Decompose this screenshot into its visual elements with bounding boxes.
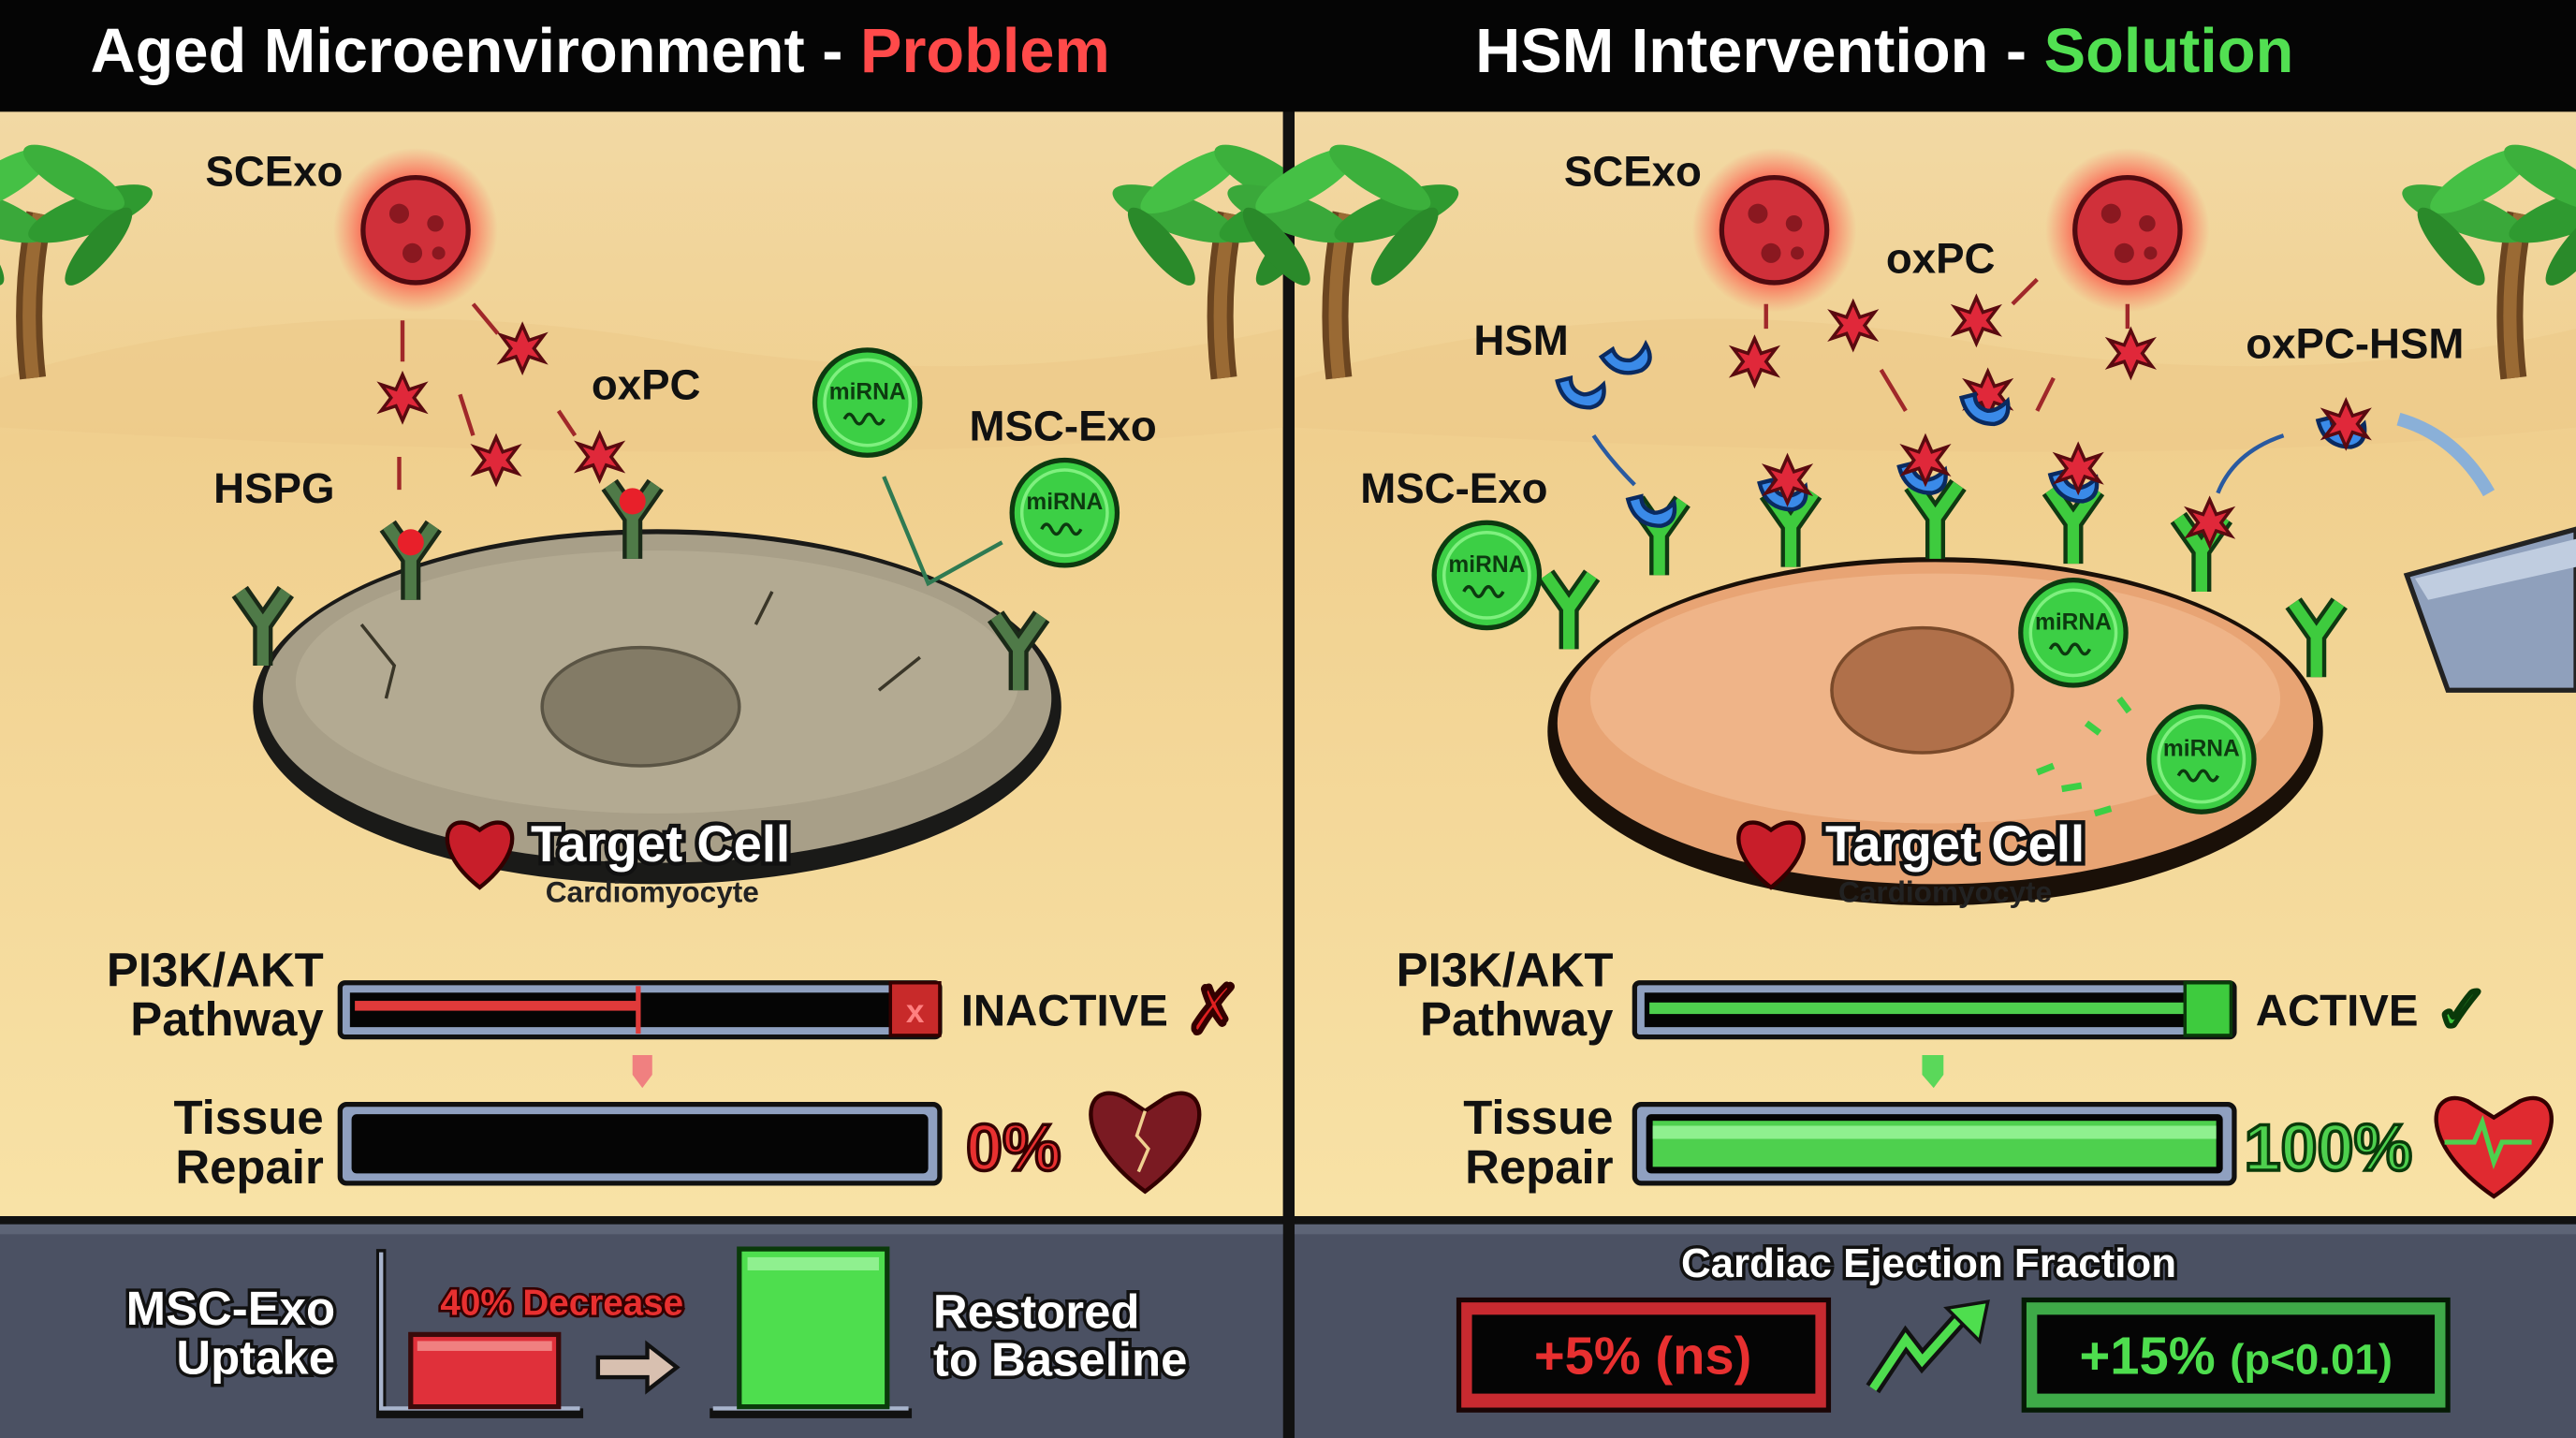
oxPC particles bbox=[1734, 279, 2152, 424]
label: Target Cell bbox=[447, 815, 790, 909]
label: Target Cell: Cardiomyocyte bbox=[1838, 875, 2052, 909]
icon: HSM free bbox=[1558, 338, 1654, 485]
label: MSC-Exo Uptake: MSC-Exo bbox=[126, 1282, 335, 1335]
label: MSC-Exo: MSC-Exo bbox=[970, 402, 1157, 449]
icon: SCExo 1 bbox=[1692, 148, 1856, 313]
icon: palm tree left bbox=[0, 133, 159, 378]
value: 0%: 0% bbox=[966, 1110, 1061, 1184]
arrow: down pink bbox=[633, 1055, 652, 1088]
icon: oxPC-HSM complex bbox=[2217, 401, 2489, 493]
label: INACTIVE bbox=[961, 972, 1241, 1046]
icon: miRNA MSC-Exo 2 bbox=[1012, 461, 1117, 565]
label: Restored to Baseline: to Baseline bbox=[933, 1332, 1187, 1386]
icon: broken heart bbox=[1090, 1093, 1199, 1192]
label: SCExo: SCExo bbox=[1564, 147, 1702, 195]
icon: SCExo bbox=[333, 148, 498, 313]
chart: uptake bars bbox=[381, 1249, 912, 1414]
label: INACTIVE: ✗ bbox=[1186, 972, 1241, 1046]
bar: pathway active bbox=[1634, 983, 2234, 1037]
label: Tissue Repair: Repair bbox=[1465, 1140, 1614, 1194]
label: PI3K/AKT Pathway: Pathway bbox=[1420, 992, 1614, 1046]
icon: tray bbox=[2407, 529, 2576, 690]
box: +15% (p<0.01) bbox=[2024, 1300, 2448, 1410]
title left: Aged Microenvironment - Problem bbox=[91, 17, 1110, 86]
box: +15% (p<0.01): +15% (p<0.01) bbox=[2079, 1327, 2393, 1386]
label: Tissue Repair bbox=[1463, 1091, 1614, 1194]
receptors: healthy with HSM bbox=[1546, 437, 2339, 677]
icon: miRNA 2 bbox=[2021, 580, 2126, 685]
icon: miRNA 3 bbox=[2149, 707, 2254, 812]
label: Restored to Baseline: Restored bbox=[933, 1284, 1139, 1338]
bar: pathway inactive: x bbox=[906, 993, 925, 1030]
label: ACTIVE: ACTIVE bbox=[2256, 986, 2418, 1035]
label: HSM: HSM bbox=[1473, 316, 1569, 364]
icon: palm tree left bbox=[1222, 133, 1465, 378]
panel: solution (right) bbox=[1222, 111, 2576, 1216]
chart: uptake bars: 40% Decrease bbox=[440, 1283, 683, 1323]
label: ACTIVE: ✓ bbox=[2435, 972, 2490, 1046]
label: PI3K/AKT Pathway bbox=[107, 943, 324, 1046]
bar: tissue repair 100 bbox=[1634, 1105, 2234, 1183]
label: Tissue Repair: Tissue bbox=[173, 1091, 324, 1144]
icon: miRNA 1 bbox=[1434, 522, 1540, 628]
label: Target Cell bbox=[1738, 815, 2085, 909]
label: SCExo: SCExo bbox=[205, 147, 343, 195]
bar: tissue repair 0 bbox=[340, 1105, 940, 1183]
label: ACTIVE bbox=[2256, 972, 2490, 1046]
label: oxPC: oxPC bbox=[592, 361, 700, 409]
label: Tissue Repair bbox=[173, 1091, 324, 1194]
label: Target Cell: Target Cell bbox=[1825, 815, 2085, 873]
icon: trend arrow bbox=[1873, 1301, 1988, 1388]
label: Tissue Repair: Repair bbox=[175, 1140, 324, 1194]
label: PI3K/AKT Pathway bbox=[1397, 943, 1614, 1046]
label: INACTIVE: INACTIVE bbox=[961, 986, 1168, 1035]
label: PI3K/AKT Pathway: Pathway bbox=[130, 992, 324, 1046]
box: +5% (ns): +5% (ns) bbox=[1534, 1327, 1751, 1386]
label: Target Cell: Target Cell bbox=[531, 815, 790, 873]
header bar bbox=[0, 0, 2576, 111]
label: PI3K/AKT Pathway: PI3K/AKT bbox=[107, 943, 324, 996]
icon: heart with pulse bbox=[2437, 1098, 2552, 1196]
label: oxPC: oxPC bbox=[1886, 234, 1995, 282]
bar: pathway inactive bbox=[340, 983, 940, 1037]
label: Tissue Repair: Tissue bbox=[1463, 1091, 1614, 1144]
label: MSC-Exo Uptake: Uptake bbox=[176, 1331, 335, 1385]
label: HSPG: HSPG bbox=[213, 464, 334, 512]
target cell (aged) bbox=[253, 529, 1061, 884]
divider bbox=[1283, 111, 1295, 1438]
title right: HSM Intervention - Solution bbox=[1475, 17, 2293, 86]
icon: miRNA MSC-Exo bbox=[815, 350, 920, 455]
arrow: down green bbox=[1922, 1055, 1943, 1088]
icon: palm tree right bbox=[2395, 133, 2576, 378]
receptors: damaged HSPG bbox=[240, 485, 1042, 690]
oxPC particles bbox=[381, 304, 621, 490]
box: +5% (ns) bbox=[1459, 1300, 1828, 1410]
icon: palm tree right bbox=[1106, 133, 1350, 378]
value: 100%: 100% bbox=[2244, 1110, 2412, 1184]
label: Restored to Baseline bbox=[933, 1284, 1187, 1386]
icon: SCExo 2 bbox=[2045, 148, 2210, 313]
arrows: MSC-Exo bouncing bbox=[884, 477, 1003, 583]
panel: problem (left) bbox=[0, 111, 1350, 1216]
label: PI3K/AKT Pathway: PI3K/AKT bbox=[1397, 943, 1614, 996]
target cell (healthy) bbox=[1547, 557, 2323, 905]
label: MSC-Exo Uptake bbox=[126, 1282, 335, 1385]
label: MSC-Exo: MSC-Exo bbox=[1360, 464, 1547, 512]
label: Target Cell: Cardiomyocyte bbox=[546, 875, 759, 909]
miRNA fragments bbox=[2037, 698, 2130, 814]
label: Cardiac Ejection Fraction: Cardiac Ejection Fraction bbox=[1681, 1240, 2176, 1286]
label: oxPC-HSM: oxPC-HSM bbox=[2246, 320, 2464, 368]
panel: bottom strip bbox=[0, 1216, 2576, 1438]
